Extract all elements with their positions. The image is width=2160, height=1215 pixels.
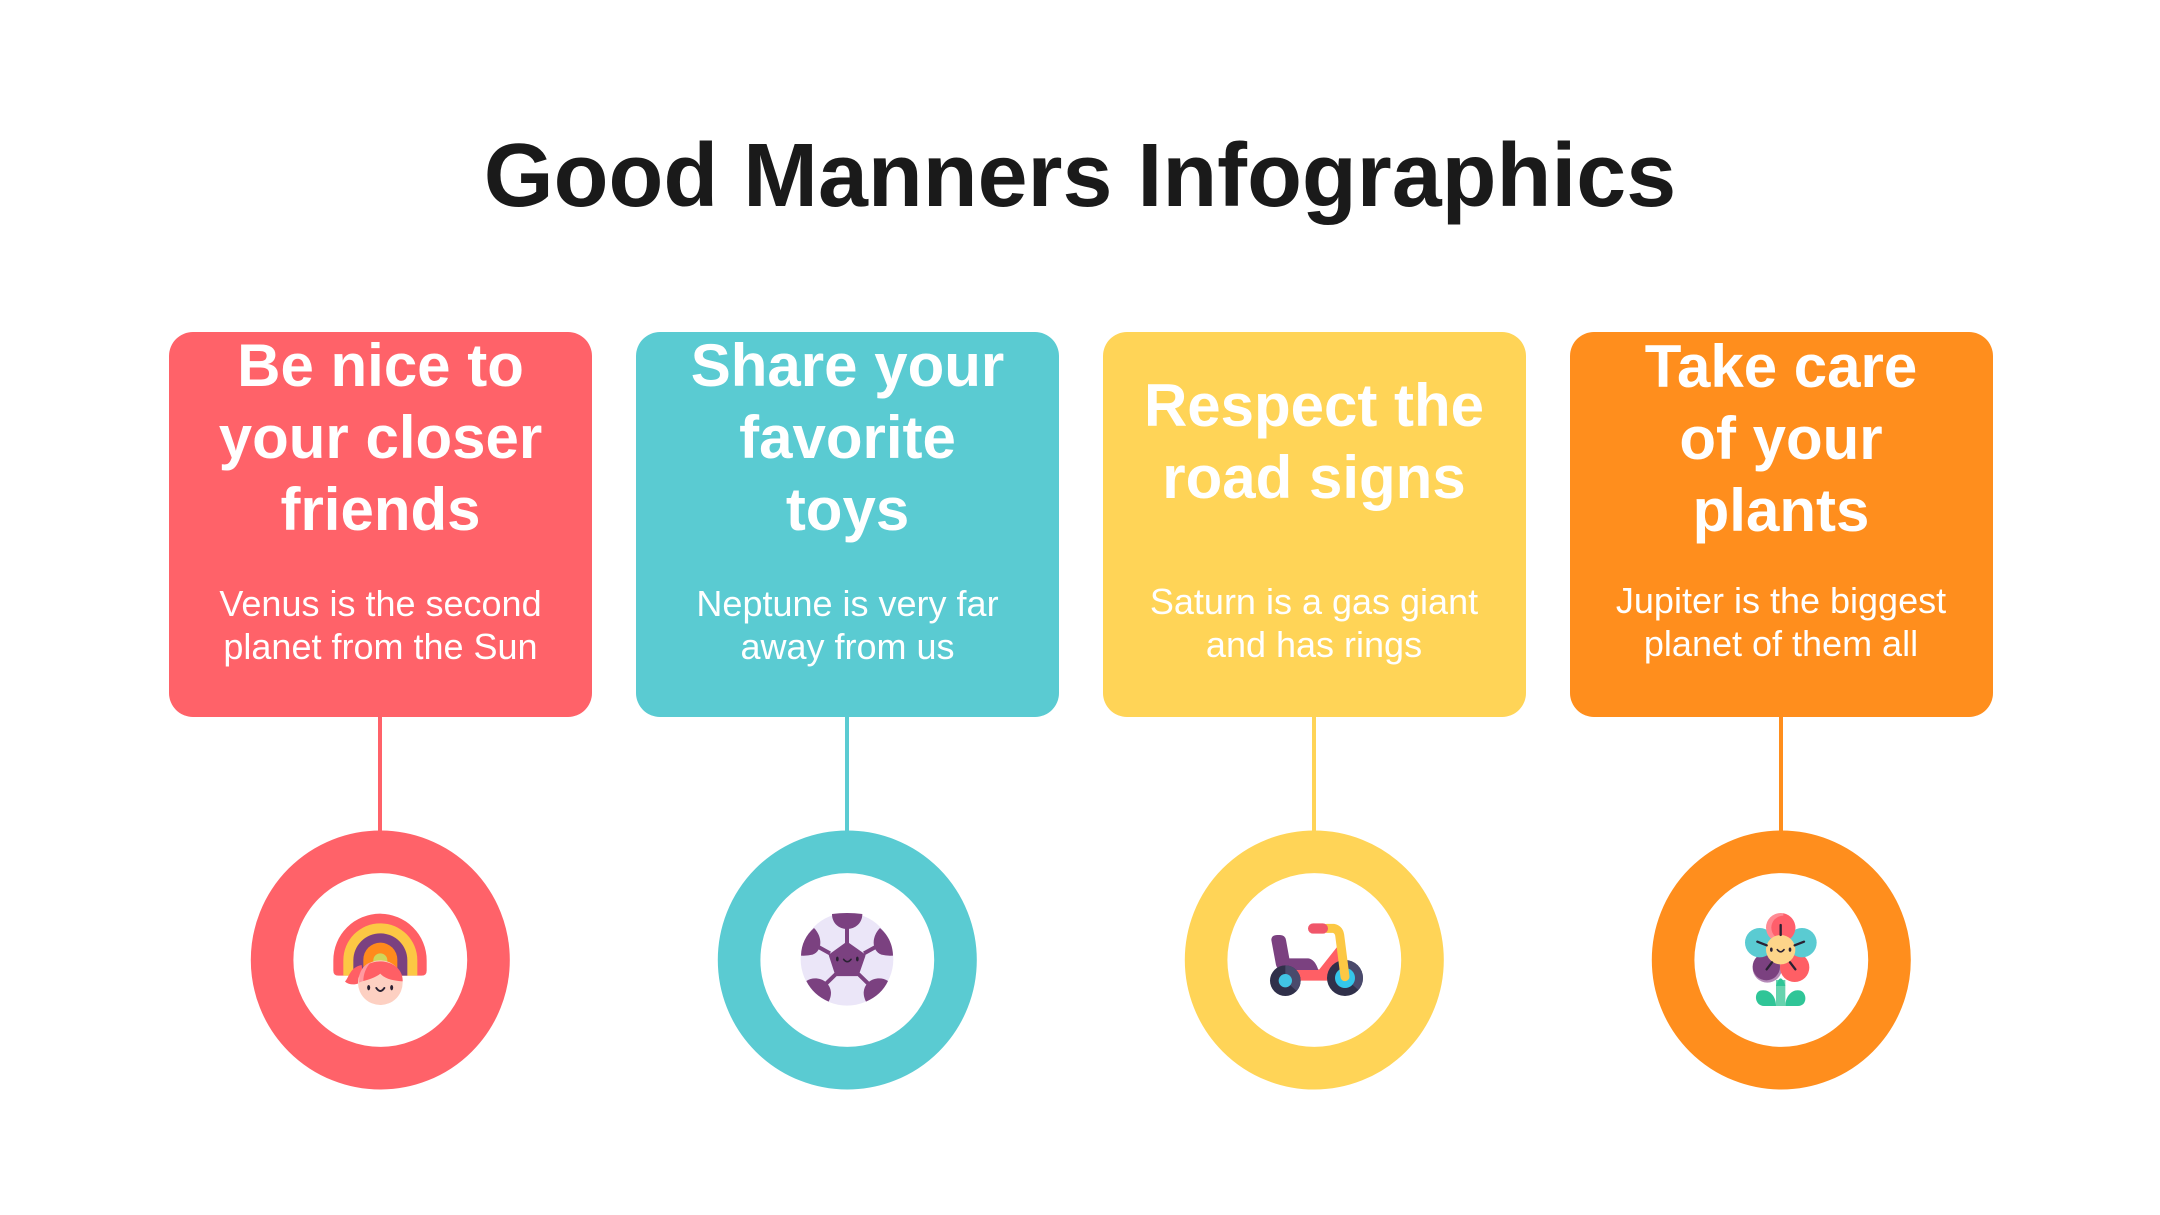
heading: share toys: favorite: [739, 404, 956, 471]
heading: be nice: your closer: [219, 404, 542, 471]
icon: soccer ball: [801, 913, 893, 1006]
heading: be nice: Be nice to: [237, 332, 524, 399]
heading: plants: plants: [1693, 476, 1869, 544]
text: neptune: away from us: [740, 626, 955, 667]
text: venus: [219, 582, 542, 667]
text: neptune: [696, 582, 999, 667]
panel: be nice: [169, 332, 592, 717]
connector: yellow: [1312, 716, 1316, 836]
text: jupiter: [1616, 580, 1946, 664]
heading: road signs: Respect the: [1144, 372, 1484, 439]
heading: road signs: road signs: [1162, 444, 1466, 511]
heading: plants: Take care: [1645, 332, 1917, 400]
heading: share toys: Share your: [691, 332, 1004, 399]
text: saturn: Saturn is a gas giant: [1150, 580, 1478, 622]
ring: yellow: [1206, 852, 1423, 1068]
text: saturn: and has rings: [1206, 624, 1422, 665]
heading: plants: [1645, 332, 1917, 544]
ring: orange: [1673, 852, 1890, 1068]
text: saturn: [1150, 580, 1478, 665]
text: jupiter: planet of them all: [1644, 623, 1918, 664]
connector: orange: [1779, 716, 1783, 836]
heading: plants: of your: [1679, 404, 1883, 472]
text: neptune: Neptune is very far: [696, 582, 999, 624]
connector: red: [378, 716, 382, 836]
icon: rainbow girl: [333, 914, 427, 1005]
title: Good Manners Infographics: [484, 126, 1676, 226]
text: venus: planet from the Sun: [223, 626, 538, 667]
text: jupiter: Jupiter is the biggest: [1616, 580, 1946, 621]
connector: teal: [845, 716, 849, 836]
heading: be nice: [219, 332, 542, 543]
panel: road signs: [1102, 332, 1526, 717]
heading: be nice: friends: [280, 476, 481, 543]
icon: tricycle: [1270, 923, 1363, 996]
panel: share toys: [636, 332, 1059, 717]
ring: red: [272, 852, 488, 1068]
text: venus: Venus is the second: [219, 582, 542, 624]
ring: teal: [739, 852, 956, 1068]
heading: road signs: [1144, 372, 1484, 511]
icon: flower: [1745, 913, 1817, 1006]
heading: share toys: toys: [786, 476, 909, 543]
heading: share toys: [691, 332, 1004, 543]
panel: plants: [1570, 332, 1992, 717]
